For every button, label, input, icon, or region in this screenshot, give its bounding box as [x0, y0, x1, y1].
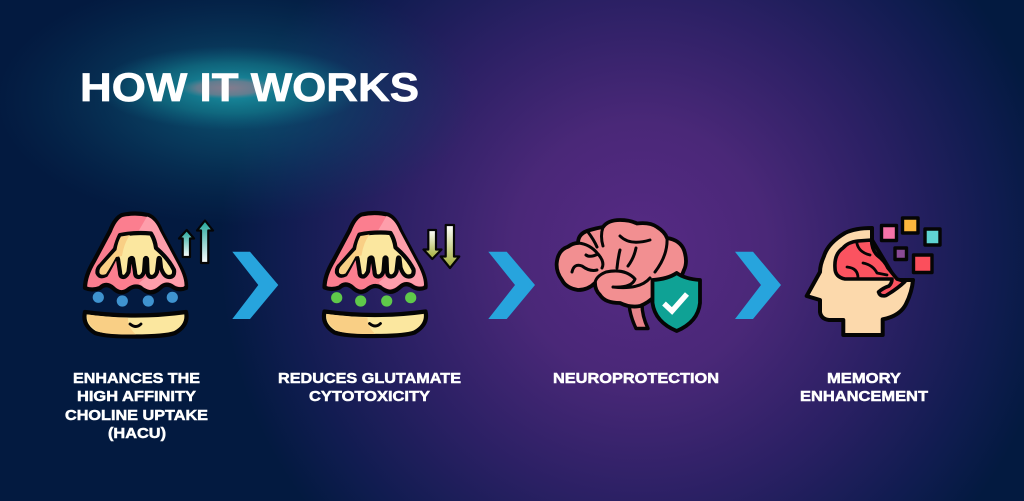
label: step 4: [800, 371, 928, 405]
arrow: step 3 to 4: [735, 252, 781, 319]
label: step 1: HIGH AFFINITY: [77, 389, 196, 405]
label: step 4: ENHANCEMENT: [800, 389, 928, 405]
label: step 2: CYTOTOXICITY: [309, 389, 430, 405]
label: step 3: NEUROPROTECTION: [553, 371, 719, 387]
label: step 1: ENHANCES THE: [73, 371, 200, 387]
arrow: step 2 to 3: [488, 252, 535, 319]
label: step 1: (HACU): [108, 426, 166, 442]
icon: synapse with falling arrows: [324, 213, 459, 336]
label: step 2: REDUCES GLUTAMATE: [278, 371, 461, 387]
icon: synapse with rising arrows: [84, 214, 213, 336]
title: HOW IT WORKS: [80, 66, 419, 110]
label: step 1: [65, 371, 208, 442]
arrow: step 1 to 2: [232, 252, 278, 319]
icon: brain with shield: [557, 220, 700, 331]
label: step 4: MEMORY: [827, 371, 901, 387]
label: step 1: CHOLINE UPTAKE: [65, 408, 208, 424]
label: step 2: [278, 371, 461, 405]
title glow: [0, 0, 475, 225]
icon: head with memory blocks: [807, 218, 940, 335]
